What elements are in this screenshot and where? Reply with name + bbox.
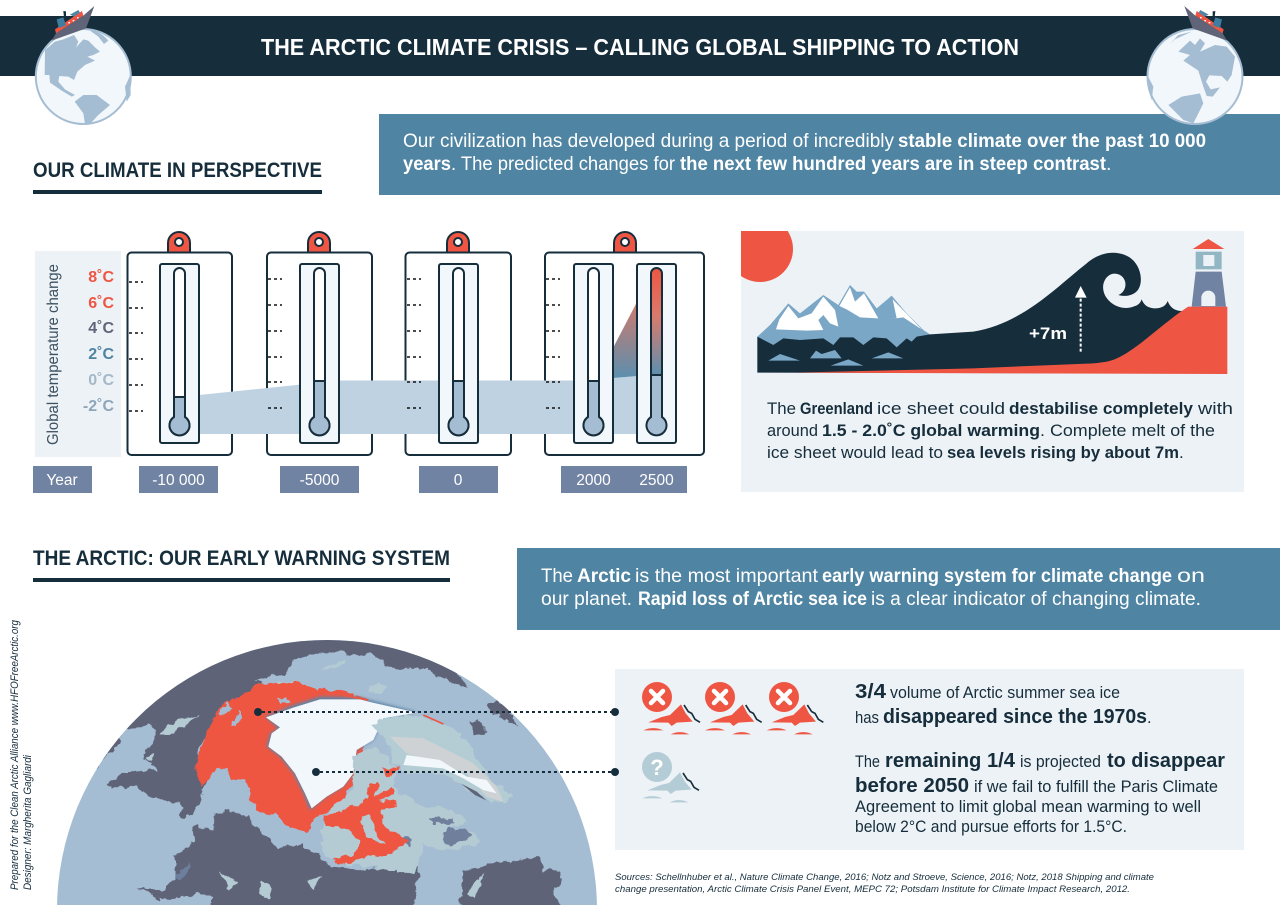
arctic text box: early warning system for climate change	[822, 565, 1172, 587]
arctic text box	[517, 548, 1280, 630]
left globe with ship	[36, 6, 131, 124]
thermometer chart	[128, 232, 704, 455]
greenland text: Greenland	[800, 399, 873, 418]
year labels: -5000	[300, 472, 340, 489]
sea ice text	[855, 680, 1225, 836]
temperature axis: 8˚C	[88, 269, 114, 286]
year labels	[33, 466, 687, 493]
greenland text: The	[767, 399, 796, 418]
right globe with ship	[1147, 6, 1242, 124]
remaining sea ice glow	[265, 697, 417, 810]
year labels: Year	[46, 472, 78, 489]
sea ice text: to disappear	[1107, 749, 1225, 772]
intro text box	[379, 114, 1280, 195]
greenland text: .	[1179, 443, 1184, 462]
sea ice text: remaining 1/4	[885, 749, 1016, 772]
island inside channels	[360, 815, 383, 843]
intro text box: .	[1106, 153, 1111, 175]
icon: remaining quarter: ?	[650, 755, 664, 780]
dark channels	[400, 818, 473, 848]
arctic text box: on	[1177, 565, 1205, 587]
heading: our climate in perspective: OUR CLIMATE IN PERSPECTIVE	[33, 159, 322, 182]
greenland text	[767, 399, 1233, 462]
year labels: 2500	[639, 472, 674, 489]
sources: Sources: Schellnhuber et al., Nature Climate Change, 2016; Notz and Stroeve, Science, 2016; Notz, 2018 Shipping and climate	[615, 872, 1154, 883]
sea ice text: The	[855, 753, 880, 771]
arctic lakes	[218, 696, 288, 727]
temperature axis: Global temperature change	[45, 264, 62, 445]
greenland text: . Complete melt of the	[1040, 421, 1215, 440]
credits: Designer: Margherita Gagliardi	[22, 755, 34, 890]
temperature axis: 6˚C	[88, 295, 114, 312]
temperature axis: 4˚C	[88, 320, 114, 337]
cards	[128, 252, 704, 455]
greenland text: ice sheet could	[877, 399, 1005, 418]
heading: the arctic early warning system	[33, 547, 450, 582]
sea ice text: if we fail to fulfill the Paris Climate	[974, 778, 1218, 796]
intro text box: years	[403, 153, 451, 175]
sources: change presentation, Arctic Climate Crisis Panel Event, MEPC 72; Potsdam Institute for Climate Impact Research, 2012.	[615, 884, 1130, 895]
thermometer 2500	[637, 264, 676, 443]
lost sea ice area	[195, 683, 367, 832]
arctic text box: is the most important	[635, 565, 819, 587]
temperature axis: -2˚C	[83, 398, 114, 415]
temperature band	[199, 376, 637, 434]
panel: greenland sea level	[727, 216, 1244, 492]
light tundra patches	[145, 658, 483, 900]
label: +7m: +7m	[1029, 324, 1067, 343]
heading: the arctic early warning system: THE ARCTIC: OUR EARLY WARNING SYSTEM	[33, 547, 450, 570]
greenland text: sea levels rising by about 7m	[947, 443, 1179, 462]
rough arctic islands group	[320, 715, 513, 873]
greenland dark coast	[461, 783, 487, 801]
land: norway and europe	[460, 702, 567, 905]
arctic text box: our planet.	[541, 588, 632, 610]
heading: our climate in perspective	[33, 159, 322, 194]
temperature axis: 0˚C	[88, 372, 114, 389]
arctic text box: is a clear indicator of changing climate.	[871, 588, 1201, 610]
thermometer 2000	[574, 264, 613, 443]
land: siberia and north	[96, 640, 468, 819]
greenland melt	[403, 755, 497, 793]
credits: Prepared for the Clean Arctic Alliance www.HFOFreeArctic.org	[9, 619, 21, 890]
credits	[9, 619, 34, 890]
year labels: 0	[454, 472, 463, 489]
arctic text box: Arctic	[577, 565, 631, 587]
projected warming wedge	[613, 302, 637, 378]
sea ice text: has	[855, 709, 879, 727]
land: north america	[137, 812, 420, 905]
sources	[615, 872, 1154, 895]
year labels: 2000	[576, 472, 611, 489]
icon: remaining quarter	[642, 752, 699, 802]
illustration: wave, mountains and lighthouse	[757, 239, 1227, 374]
northern red inlet	[383, 766, 398, 780]
greenland text: with	[1197, 399, 1233, 418]
panel: sea ice loss	[615, 669, 1244, 850]
greenland text: around	[767, 421, 818, 440]
intro text box: . The predicted changes for	[451, 153, 675, 175]
arctic text box: The	[541, 565, 573, 587]
lost ice in channels	[323, 782, 408, 865]
icon row: three quarters lost	[642, 682, 823, 734]
greenland text: destabilise completely	[1009, 399, 1194, 418]
intro text box: stable climate over the past 10 000	[898, 130, 1206, 152]
sea ice text: before 2050	[855, 774, 969, 797]
title: THE ARCTIC CLIMATE CRISIS – CALLING GLOBAL SHIPPING TO ACTION	[261, 34, 1019, 60]
intro text box: Our civilization has developed during a period of incredibly	[403, 130, 894, 152]
arctic text box: Rapid loss of Arctic sea ice	[638, 588, 867, 610]
scale ticks	[129, 279, 560, 411]
sea ice text: Agreement to limit global mean warming to well	[855, 798, 1201, 816]
thermometer -10000	[160, 264, 199, 443]
rough coastlines group	[96, 640, 562, 905]
card tabs	[168, 232, 636, 253]
icon: sun	[741, 231, 793, 282]
caspian lake	[174, 865, 189, 880]
temperature axis	[35, 251, 121, 457]
remaining sea ice	[266, 699, 417, 808]
year labels: -10 000	[152, 472, 205, 489]
greenland text: 1.5 - 2.0˚C global warming	[822, 421, 1040, 440]
greenland	[373, 715, 513, 803]
sea ice text: is projected	[1020, 753, 1101, 771]
sea ice text: disappeared since the 1970s	[883, 705, 1147, 728]
sea ice text: below 2°C and pursue efforts for 1.5°C.	[855, 818, 1127, 836]
intro text box: the next few hundred years are in steep contrast	[680, 153, 1106, 175]
temperature axis: 2˚C	[88, 346, 114, 363]
callout lines	[254, 708, 619, 776]
header bar	[0, 16, 1280, 76]
canadian archipelago	[320, 747, 480, 873]
thermometer -5000	[300, 264, 339, 443]
greenland ice	[390, 737, 503, 802]
red coast accents	[340, 694, 443, 724]
thermometer 0	[439, 264, 478, 443]
sea ice text: .	[1147, 709, 1152, 727]
greenland text: ice sheet would lead to	[767, 443, 943, 462]
map: arctic globe	[57, 640, 597, 905]
sea ice text: volume of Arctic summer sea ice	[890, 684, 1120, 702]
sea ice text: 3/4	[855, 680, 887, 703]
